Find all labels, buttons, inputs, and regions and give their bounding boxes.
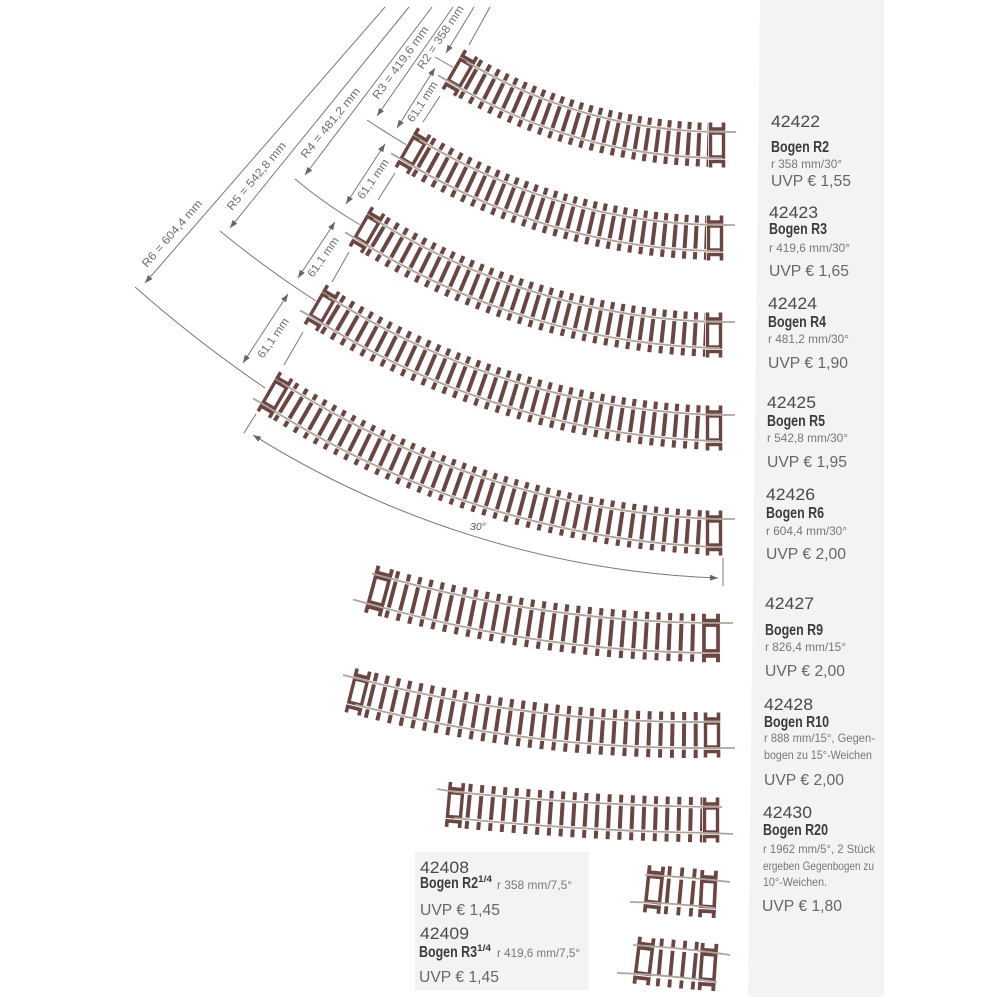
product text: 42409: r 419,6 mm/7,5°: [497, 946, 580, 960]
product text: 42409: Bogen R3: [419, 944, 477, 961]
dimension: R3: R3 = 419,6 mm: [371, 24, 432, 102]
product text: 42422: UVP € 1,55: [771, 173, 851, 190]
product text: 42408: 42408: [420, 859, 469, 877]
panel: right price column: [748, 0, 884, 997]
product text: 42428: bogen zu 15°-Weichen: [764, 748, 872, 762]
panel: bottom left price box: [415, 852, 589, 990]
product text: 42425: 42425: [767, 394, 816, 412]
product text: 42430: 10°-Weichen.: [763, 875, 827, 889]
track: R3: [391, 126, 735, 262]
dimension: track spacing 61,1 mm: 61,1 mm: [306, 235, 342, 280]
product text: 42408: 1/4: [478, 874, 492, 884]
product text: 42423: r 419,6 mm/30°: [769, 241, 850, 255]
product text: 42426: 42426: [766, 486, 815, 504]
product text: 42423: Bogen R3: [769, 221, 827, 238]
dimension: R4: R4 = 481,2 mm: [299, 86, 363, 161]
dimension: 30 degree arc: 30°: [470, 521, 486, 533]
track: R9: [353, 563, 733, 664]
product text: 42428: UVP € 2,00: [764, 772, 844, 789]
product text: 42409: UVP € 1,45: [419, 969, 499, 986]
track: R4: [345, 205, 735, 359]
product text: 42425: Bogen R5: [767, 413, 825, 430]
product text: 42428: 42428: [764, 696, 813, 714]
dimension: R2: R2 = 358 mm: [416, 4, 467, 72]
dimension: track spacing 61,1 mm: 61,1 mm: [405, 80, 441, 125]
track: R5: [300, 283, 735, 452]
product text: 42424: [768, 295, 849, 372]
product text: 42422: [771, 113, 851, 190]
dimension: track spacing 61,1 mm: [243, 68, 441, 433]
product text: 42427: UVP € 2,00: [765, 663, 845, 680]
dimension: R5: [220, 7, 409, 301]
product text: 42409: 1/4: [477, 943, 491, 953]
product text: 42422: r 358 mm/30°: [771, 157, 842, 171]
dimension: R6: R6 = 604,4 mm: [140, 198, 205, 270]
product text: 42408: UVP € 1,45: [420, 902, 500, 919]
product text: 42408: [420, 859, 572, 919]
product text: 42424: r 481,2 mm/30°: [768, 332, 849, 346]
track: R2: [438, 48, 736, 169]
product text: 42422: Bogen R2: [771, 139, 829, 156]
product text: 42428: Bogen R10: [764, 714, 829, 731]
product text: 42428: [764, 696, 875, 789]
product text: 42424: Bogen R4: [768, 314, 826, 331]
product text: 42408: r 358 mm/7,5°: [497, 878, 572, 892]
product text: 42430: UVP € 1,80: [762, 898, 842, 915]
dimension: R5: R5 = 542,8 mm: [225, 140, 289, 213]
product text: 42425: UVP € 1,95: [767, 454, 847, 471]
dimension: track spacing 61,1 mm: 61,1 mm: [356, 157, 392, 202]
track: R6: [253, 370, 735, 557]
dimension: 30 degree arc: [253, 435, 723, 586]
product text: 42426: UVP € 2,00: [766, 546, 846, 563]
product text: 42430: r 1962 mm/5°, 2 Stück: [763, 842, 876, 856]
product text: 42430: ergeben Gegenbogen zu: [763, 859, 874, 873]
product text: 42423: 42423: [769, 204, 818, 222]
product text: 42422: 42422: [771, 113, 820, 131]
track: R20: [437, 780, 733, 844]
product text: 42408: Bogen R2: [420, 875, 478, 892]
product text: 42425: [767, 394, 848, 471]
product text: 42426: r 604,4 mm/30°: [766, 524, 847, 538]
product text: 42423: UVP € 1,65: [769, 263, 849, 280]
product text: 42424: 42424: [768, 295, 817, 313]
product text: 42430: 42430: [763, 804, 812, 822]
product text: 42430: [762, 804, 876, 915]
product text: 42426: [766, 486, 847, 563]
track: R10: [343, 667, 735, 759]
product text: 42423: [769, 204, 850, 280]
product text: 42428: r 888 mm/15°, Gegen-: [764, 731, 875, 745]
product text: 42427: 42427: [765, 595, 814, 613]
radius annotation lines and labels: [135, 4, 490, 388]
track: R3 1/4 short piece: [617, 935, 730, 993]
dimension: track spacing 61,1 mm: 61,1 mm: [256, 316, 292, 361]
product text: 42427: r 826,4 mm/15°: [765, 640, 846, 654]
product text: 42427: Bogen R9: [765, 622, 823, 639]
dimension: R3: [367, 7, 453, 147]
dimension: R6: [135, 7, 385, 388]
product text: 42409: 42409: [420, 925, 469, 943]
product text: 42430: Bogen R20: [763, 822, 828, 839]
product text: 42426: Bogen R6: [766, 505, 824, 522]
dimension: R4: [295, 7, 432, 226]
product text: 42409: [419, 925, 580, 986]
product text: 42424: UVP € 1,90: [768, 355, 848, 372]
dimension: R2: [416, 4, 490, 72]
product text: 42425: r 542,8 mm/30°: [767, 431, 848, 445]
track: R2 1/4 short piece: [630, 863, 730, 920]
product text: 42427: [765, 595, 846, 680]
